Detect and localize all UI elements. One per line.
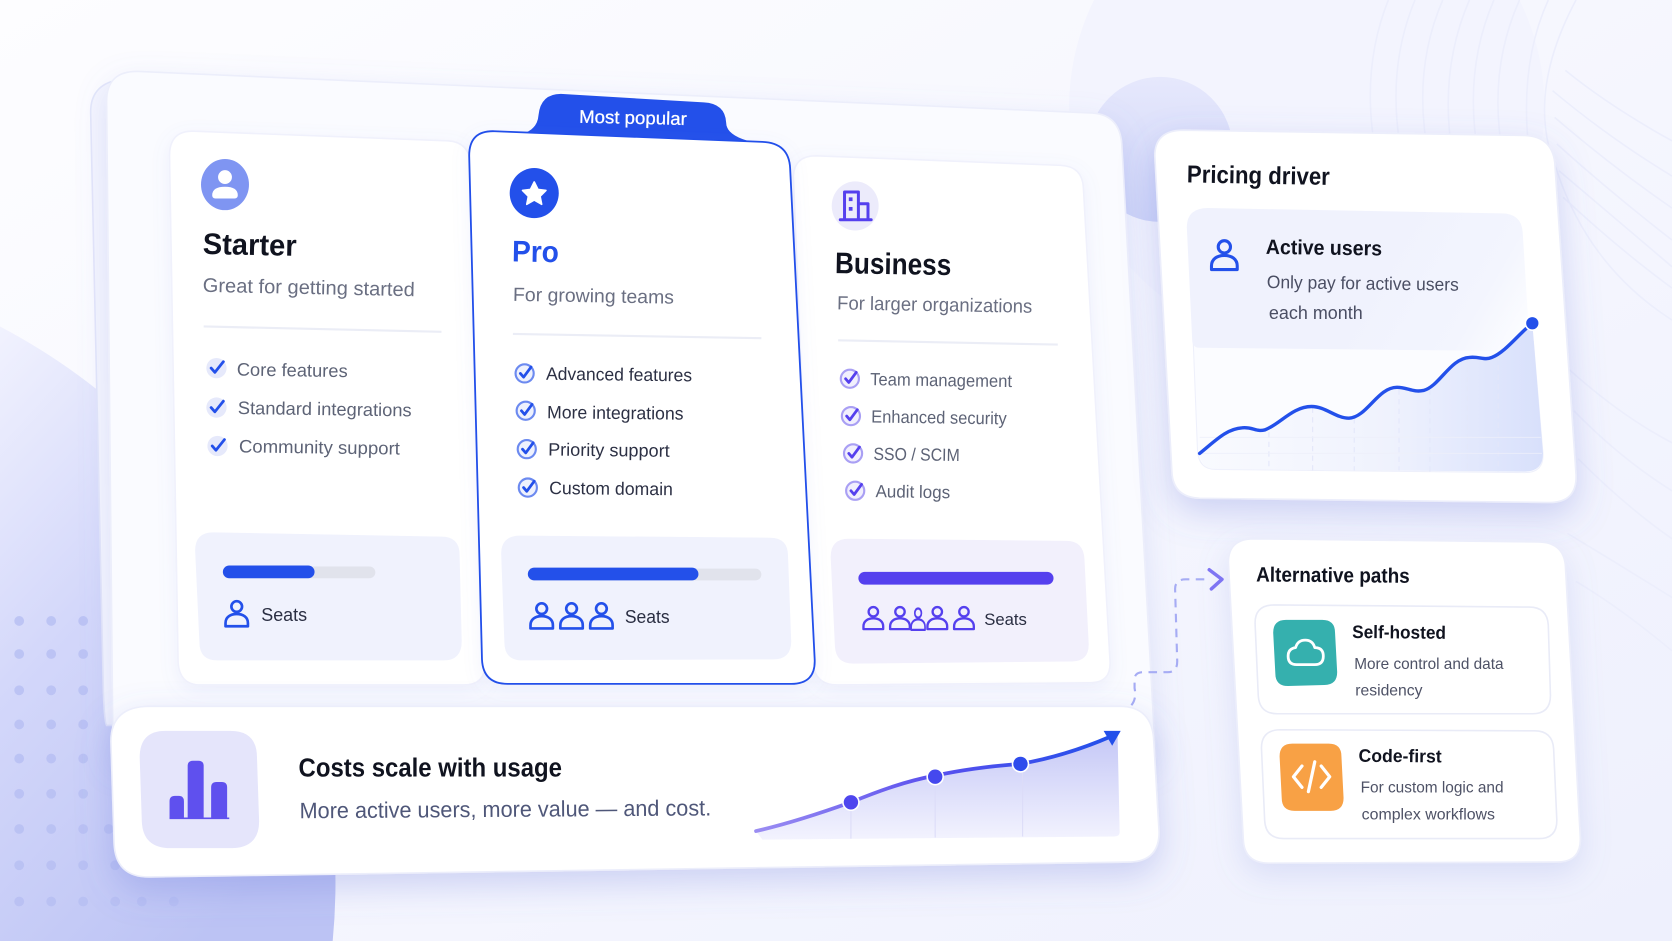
- main pricing panel: [107, 71, 1156, 757]
- background: small lavender circle: [1088, 77, 1233, 222]
- feature list: pro: [516, 364, 692, 499]
- heading: alternative paths: Alternative paths: [1256, 563, 1410, 588]
- feature list: pro: Priority support: [548, 440, 670, 461]
- pricing driver card surface: [1155, 130, 1576, 503]
- description: code-first: [1361, 780, 1504, 823]
- label: code-first: Code-first: [1358, 746, 1442, 766]
- seats panel: starter: Seats: [261, 605, 307, 625]
- option: self-hosted: [1255, 605, 1550, 714]
- subheading: business: For larger organizations: [837, 293, 1032, 318]
- divider: [513, 334, 761, 338]
- active users panel: [1187, 208, 1529, 351]
- line chart: active users growth: [1200, 316, 1543, 472]
- icon: cloud tile: [1273, 620, 1337, 686]
- subheading: starter: Great for getting started: [202, 275, 415, 301]
- icon: starter avatar: [201, 159, 249, 210]
- divider: [204, 326, 441, 332]
- dashed connector arrow to alternative paths: [1131, 570, 1222, 705]
- card: Business: [793, 156, 1110, 685]
- background: large lavender blob left: [0, 326, 335, 941]
- icon: bar chart tile: [140, 731, 259, 848]
- feature list: business: [841, 369, 1012, 502]
- heading: Business: Business: [835, 247, 952, 282]
- chart frame: [1193, 341, 1543, 473]
- seats panel: business: [831, 539, 1089, 664]
- feature list: starter: [206, 358, 412, 459]
- description: code-first: For custom logic and: [1361, 780, 1504, 797]
- alternative paths card surface: [1228, 539, 1580, 863]
- option: code-first: [1261, 730, 1557, 839]
- feature list: business: Team management: [870, 369, 1012, 391]
- feature list: pro: More integrations: [547, 402, 684, 424]
- starter card surface: [170, 131, 485, 685]
- description: active users: [1267, 272, 1459, 323]
- seats panel: business: Seats: [984, 610, 1027, 629]
- description: costs: More active users, more value — and cost.: [299, 795, 711, 823]
- label: active users: Active users: [1266, 236, 1382, 261]
- feature list: pro: Advanced features: [546, 364, 692, 385]
- subheading: pro: For growing teams: [513, 285, 674, 309]
- background: large faint circle top right: [1069, 0, 1544, 348]
- icon: code tile: [1280, 744, 1344, 811]
- feature list: starter: Community support: [239, 436, 400, 459]
- seats panel: pro: [501, 536, 791, 660]
- panel: costs scale with usage: [111, 706, 1159, 877]
- heading: Pro: Pro: [512, 235, 559, 269]
- seats panel: pro: Seats: [625, 607, 670, 627]
- feature list: business: Audit logs: [875, 481, 951, 502]
- line chart: costs: [756, 731, 1121, 840]
- icon: active user: [1211, 241, 1237, 270]
- description: code-first: complex workflows: [1362, 806, 1495, 823]
- feature list: business: SSO / SCIM: [873, 444, 960, 465]
- background: dot grid: [14, 616, 179, 906]
- divider: [838, 340, 1058, 345]
- business card surface: [793, 156, 1110, 685]
- label: self-hosted: Self-hosted: [1352, 622, 1446, 643]
- pro card surface: [469, 131, 815, 684]
- costs panel surface: [111, 706, 1159, 877]
- heading: Starter: Starter: [202, 228, 297, 263]
- description: self-hosted: [1354, 656, 1504, 700]
- description: self-hosted: More control and data: [1354, 656, 1504, 673]
- icon: pro star: [510, 168, 559, 218]
- seats panel: starter: [195, 532, 462, 660]
- panel: pricing driver: [1155, 130, 1576, 503]
- description: active users: each month: [1269, 303, 1363, 323]
- feature list: starter: Standard integrations: [238, 398, 412, 420]
- card: Pro: [469, 131, 815, 684]
- feature list: business: Enhanced security: [871, 406, 1007, 428]
- most popular tab: Most popular: [579, 107, 687, 129]
- background: concentric arc lines: [1370, 0, 1672, 651]
- heading: pricing driver: Pricing driver: [1187, 161, 1330, 191]
- icon: business building: [832, 181, 879, 230]
- heading: costs: Costs scale with usage: [299, 755, 562, 783]
- panel: alternative paths: [1228, 539, 1580, 863]
- card: Starter: [170, 131, 485, 685]
- description: self-hosted: residency: [1355, 683, 1422, 700]
- description: active users: Only pay for active users: [1267, 272, 1459, 295]
- feature list: pro: Custom domain: [549, 478, 673, 499]
- most popular tab: [520, 94, 752, 149]
- main panel back layer: [91, 80, 171, 725]
- feature list: starter: Core features: [237, 360, 348, 381]
